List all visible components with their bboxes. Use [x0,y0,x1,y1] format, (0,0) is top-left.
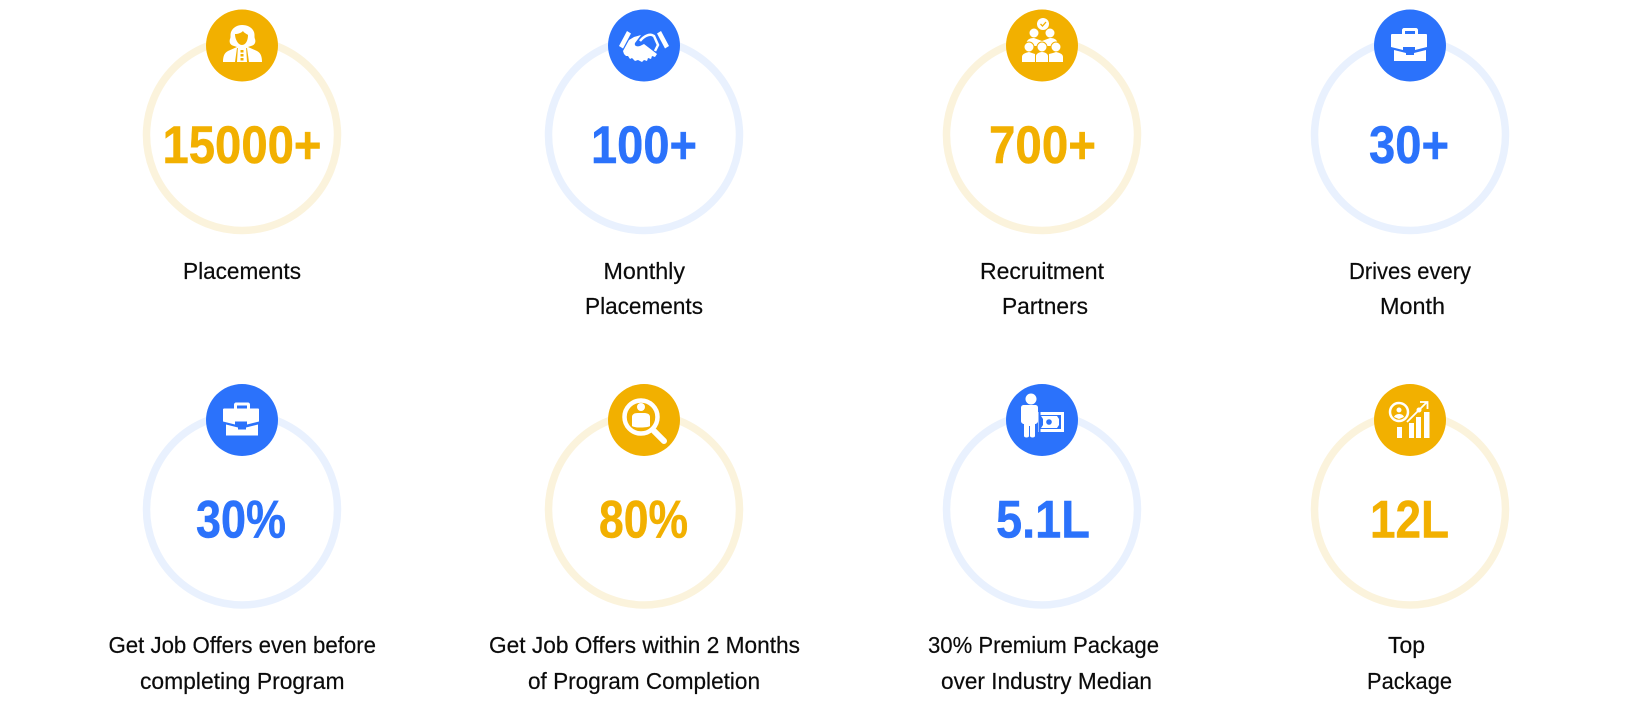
label: Placements [585,293,703,319]
label: of Program Completion [528,668,760,694]
label: Monthly [604,258,685,284]
ring [1314,40,1506,230]
ring [548,40,740,230]
label [108,632,376,694]
panel: 30% job offers [108,384,376,694]
icon: magnifier with person [608,384,680,456]
label: 30% Premium Package [928,632,1159,658]
label: Get Job Offers even before [108,632,376,658]
icon: group of people [1006,10,1078,82]
panel: 15000+ placements [146,10,338,284]
ring [946,40,1138,230]
ring [1314,414,1506,605]
label: over Industry Median [941,668,1152,694]
label [1367,632,1452,694]
icon: handshake [608,10,680,82]
value: 12L [1370,490,1449,550]
label: completing Program [140,668,344,694]
value: 30+ [1369,116,1449,175]
icon: search and growth chart [1374,384,1446,456]
label [928,632,1159,694]
panel: 5.1L premium package [928,384,1159,694]
label [489,632,800,694]
value: 5.1L [996,490,1090,550]
panel: 700+ recruitment partners [946,10,1138,319]
label: Package [1367,668,1452,694]
value: 80% [599,490,688,550]
panel: 30+ drives [1314,10,1506,319]
icon: briefcase [1374,10,1446,82]
ring [146,40,338,230]
panel: 100+ monthly placements [548,10,740,319]
label: Placements [183,258,301,284]
value: 15000+ [162,116,322,175]
panel: 12L top package [1314,384,1506,694]
panel: 80% job offers [489,384,800,694]
ring [946,414,1138,605]
label [980,258,1104,319]
value: 100+ [591,116,697,175]
label: Month [1380,293,1445,319]
label [585,258,703,319]
ring [146,414,338,605]
label: Partners [1002,293,1088,319]
icon: briefcase [206,384,278,456]
ring [548,414,740,605]
label: Top [1388,632,1425,658]
icon: businesswoman [206,10,278,82]
value: 30% [196,490,286,550]
value: 700+ [989,116,1096,175]
icon: person with money [1006,384,1078,456]
label [1349,258,1471,319]
label: Drives every [1349,258,1471,284]
label: Get Job Offers within 2 Months [489,632,800,658]
label: Recruitment [980,258,1104,284]
